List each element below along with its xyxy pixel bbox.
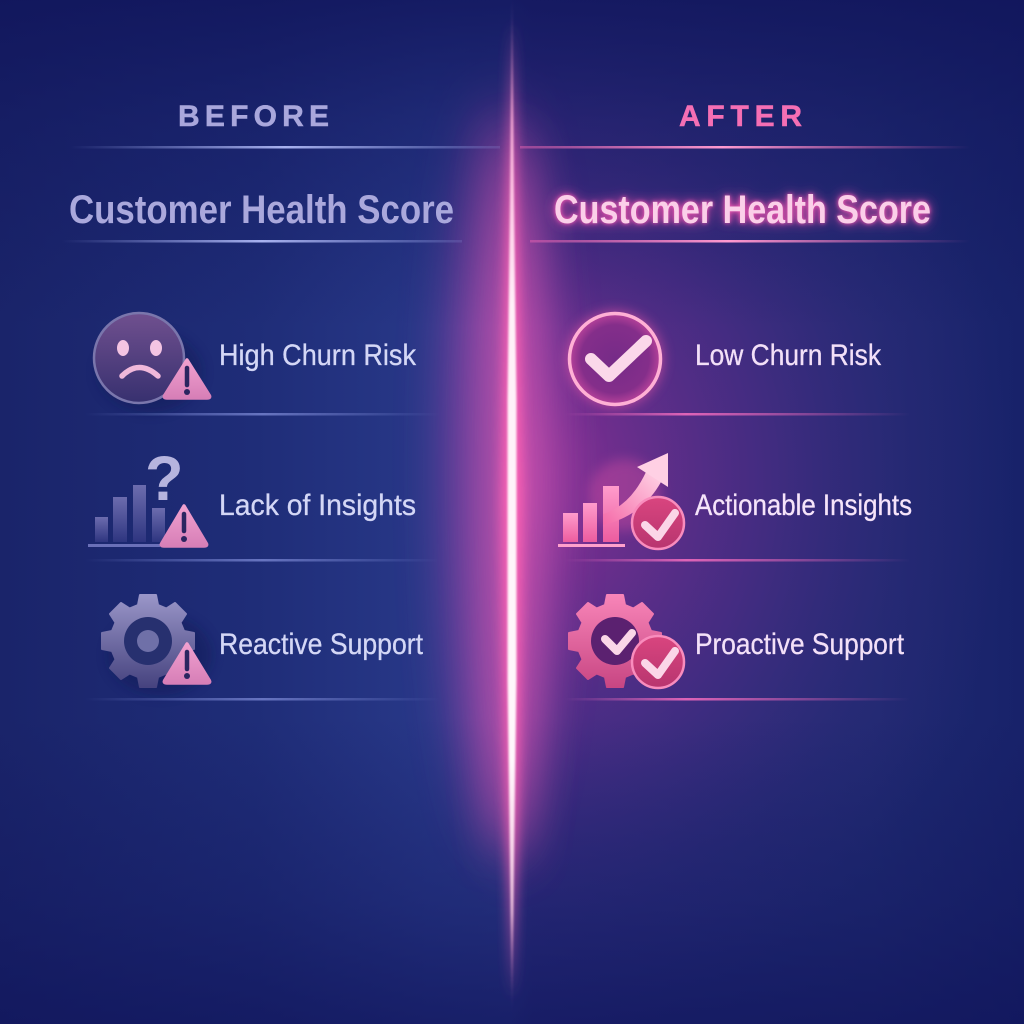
icon: check in circle [567,311,663,407]
subtitle rule: after [530,240,970,242]
label: lack of insights: Lack of Insights [219,489,416,522]
label: actionable insights: Actionable Insights [695,489,912,522]
label: reactive support: Reactive Support [219,628,424,661]
label: proactive support: Proactive Support [695,628,905,661]
panel: after [520,100,970,700]
row: reactive support [102,595,424,695]
label: high churn risk: High Churn Risk [219,339,417,372]
header rule: before [70,146,500,148]
center glowing divider [490,0,534,1015]
subtitle: customer health score before: Customer Health Score [69,188,454,232]
subtitle: customer health score after: Customer Health Score [554,188,931,232]
subtitle: customer health score after: Customer Health Score [554,188,931,232]
icon: sad face with warning [94,313,210,412]
subtitle: customer health score after: Customer Health Score [554,188,931,232]
row: low churn risk [567,311,882,407]
subtitle rule: before [62,240,462,242]
row: actionable insights [558,453,912,549]
row: proactive support [569,595,905,688]
icon: bar chart with question mark and warning: ? [145,444,183,514]
icon: rising bar chart with arrow and check badge [558,453,684,549]
header rule: after [520,146,970,148]
label: low churn risk: Low Churn Risk [695,339,882,372]
heading: before: BEFORE [178,100,329,133]
icon: bar chart with question mark and warning [88,444,207,547]
row: high churn risk [94,313,417,412]
icon: gear with warning [102,595,212,695]
heading: after: AFTER [679,100,802,133]
panel: before [62,100,500,700]
icon: gear with checks [569,595,684,688]
row: lack of insights [88,444,416,547]
